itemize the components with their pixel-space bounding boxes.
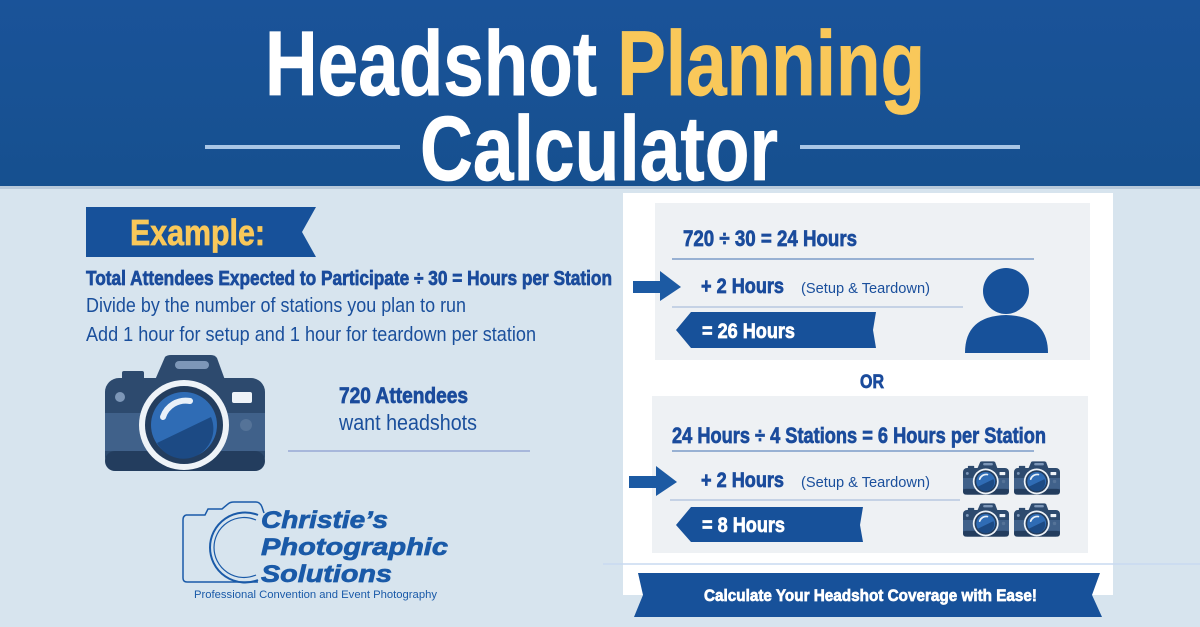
footer ribbon <box>634 573 1102 617</box>
example banner: Example: <box>130 212 265 253</box>
footer ribbon: Calculate Your Headshot Coverage with Ease! <box>704 586 1037 605</box>
box: single station: (Setup & Teardown) <box>801 280 930 297</box>
ribbon: 8 hours <box>676 507 863 542</box>
attendees callout <box>288 383 530 451</box>
ribbon: 8 hours: = 8 Hours <box>702 514 785 537</box>
example banner <box>86 207 316 257</box>
logo <box>183 502 448 601</box>
logo: Christie’s <box>261 507 388 534</box>
icon: person <box>965 268 1048 353</box>
title line 2: Calculator <box>420 98 778 200</box>
icon: camera large <box>105 355 265 471</box>
instructions text block: Add 1 hour for setup and 1 hour for teardown per station <box>86 324 536 346</box>
box: four stations <box>652 396 1088 553</box>
box: single station: 720 ÷ 30 = 24 Hours <box>683 226 857 251</box>
instructions text block: Total Attendees Expected to Participate ÷ 30 = Hours per Station <box>86 268 612 290</box>
logo: Professional Convention and Event Photography <box>194 589 437 601</box>
title line 1: Headshot Planning <box>265 13 925 115</box>
box: four stations: (Setup & Teardown) <box>801 474 930 491</box>
instructions text block: Divide by the number of stations you plan to run <box>86 295 466 317</box>
header band <box>0 0 1200 200</box>
arrow 2 <box>629 466 677 496</box>
icons: four cameras <box>963 461 1060 537</box>
logo: Photographic <box>261 534 448 561</box>
OR: OR <box>860 372 884 393</box>
instructions text block <box>86 268 612 346</box>
panel: calculation <box>603 193 1200 595</box>
logo: Solutions <box>261 561 392 588</box>
ribbon: 26 hours <box>676 312 876 348</box>
box: four stations: + 2 Hours <box>701 469 784 492</box>
box: single station: + 2 Hours <box>701 275 784 298</box>
attendees callout: 720 Attendees <box>339 383 468 408</box>
arrow 1 <box>633 271 681 301</box>
box: four stations: 24 Hours ÷ 4 Stations = 6 Hours per Station <box>672 423 1046 448</box>
attendees callout: want headshots <box>338 410 477 435</box>
box: single station <box>655 203 1090 360</box>
ribbon: 26 hours: = 26 Hours <box>702 320 795 343</box>
